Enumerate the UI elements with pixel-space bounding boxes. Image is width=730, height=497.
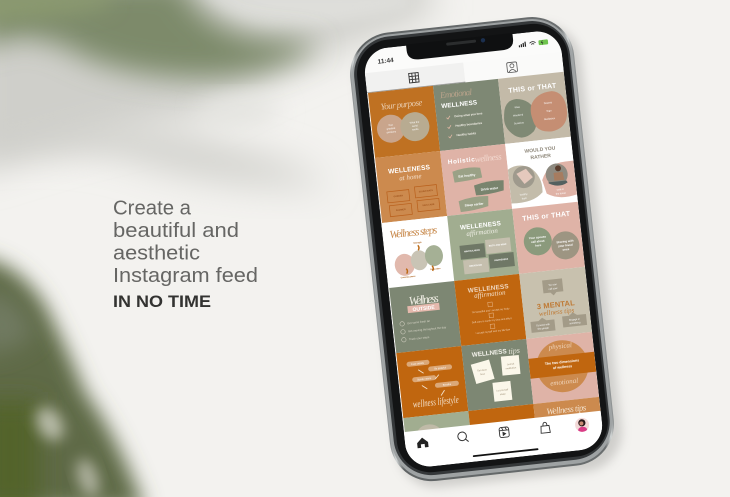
tile: wellness affirmation (orange): I accept myself and my life flow bbox=[476, 328, 510, 335]
profile tab bar bbox=[365, 52, 564, 93]
tile: wellness affirmation (orange): WELLENESS bbox=[467, 283, 510, 295]
tile: this or that (beige): Wine bbox=[514, 106, 521, 109]
icon: grid tab bbox=[409, 72, 419, 83]
tile: this or that (pink): ones bbox=[562, 247, 570, 252]
tile: wellness tips: Journal bbox=[507, 362, 515, 366]
tile: wellness lifestyle bbox=[396, 346, 468, 418]
tile: this or that (beige): Weekend bbox=[513, 113, 524, 117]
status bar: time: 11:44 bbox=[377, 57, 394, 66]
status bar: signal, wifi and battery icons bbox=[518, 39, 548, 47]
tile: 3 mental wellness tips: You can bbox=[548, 283, 558, 287]
tile: emotional wellness bbox=[433, 79, 505, 151]
tile: holistic wellness: Drink water bbox=[481, 186, 499, 192]
checklist: Healthy habits bbox=[456, 131, 477, 137]
tile: wellness tips: tips bbox=[508, 346, 520, 356]
camera bbox=[481, 38, 485, 43]
right circle: What the bbox=[410, 121, 420, 125]
left circle: Your bbox=[388, 123, 393, 127]
tile: would you rather: WOULD YOU bbox=[524, 145, 556, 155]
terracotta blob bbox=[530, 91, 567, 132]
right circle: world bbox=[412, 124, 419, 128]
tile: two dimensions of wellness: physical bbox=[547, 341, 572, 352]
tile: this or that (pink) bbox=[512, 202, 585, 274]
tile: wellness affirmation (orange): Self-care is worth my time and effort bbox=[472, 317, 512, 324]
tile: wellness lifestyle: Be grateful bbox=[434, 366, 447, 371]
phone drop shadow bbox=[353, 20, 626, 492]
checklist: Doing what you love bbox=[454, 111, 483, 118]
tile: 3 mental wellness tips: Engage in bbox=[569, 318, 581, 322]
headline text block: beautiful and bbox=[113, 220, 239, 242]
tile: wellness at home bbox=[375, 151, 447, 223]
tile: wellness affirmation (orange): I'm beautiful and I accept my body bbox=[472, 307, 510, 314]
tile: holistic wellness: Holistic bbox=[448, 156, 476, 166]
tile: would you rather: RATHER bbox=[530, 153, 552, 161]
tile: this or that (beige): Deserts bbox=[544, 101, 553, 105]
speaker bbox=[446, 40, 476, 46]
tile: 3 mental wellness tips bbox=[519, 267, 592, 339]
tile: wellness tips: Let yourself bbox=[496, 388, 509, 392]
pill labels bbox=[406, 360, 459, 388]
tile: wellness steps: Consciousness bbox=[401, 276, 416, 279]
tile row six: Wellness tips bbox=[546, 402, 587, 417]
headline text block: aesthetic bbox=[113, 242, 200, 264]
tile: wellness affirmation (sage): AWARENESS bbox=[494, 258, 509, 262]
tile: two dimensions of wellness: of wellness bbox=[553, 364, 572, 370]
green blob bbox=[504, 99, 536, 138]
headline text block: Create a bbox=[113, 198, 192, 220]
checklist bbox=[446, 111, 485, 138]
checklist: Healthy boundaries bbox=[455, 121, 483, 128]
tile: would you rather bbox=[505, 137, 578, 209]
tile: holistic wellness: Eat healthy bbox=[458, 173, 476, 179]
overlapping circles bbox=[394, 254, 414, 276]
tile: 3 mental wellness tips: call your bbox=[548, 287, 558, 291]
sticky notes bbox=[470, 355, 520, 402]
tile: holistic wellness: wellness bbox=[474, 151, 503, 164]
headline text block bbox=[113, 198, 258, 311]
tile: wellness affirmation (sage): BODY AND MIND bbox=[489, 243, 507, 248]
tile: wellness at home: at home bbox=[399, 172, 422, 183]
tile: two dimensions of wellness bbox=[526, 332, 599, 404]
tile: 3 mental wellness tips: wellness tips bbox=[538, 306, 575, 318]
home indicator bbox=[473, 448, 539, 457]
tile: two dimensions of wellness: The two dimensions bbox=[545, 358, 579, 366]
checklist: Track your steps bbox=[409, 335, 430, 341]
tile: 3 mental wellness tips: 3 MENTAL bbox=[536, 298, 576, 311]
checklist: Get moving throughout the day bbox=[408, 325, 447, 333]
tile: would you rather: walk in bbox=[557, 188, 565, 192]
tile: 3 mental wellness tips: Connect with bbox=[536, 323, 551, 327]
tile: would you rather: the forest bbox=[556, 192, 566, 196]
icon: tagged tab bbox=[507, 62, 518, 73]
tile: would you rather: food bbox=[522, 197, 527, 200]
orange marks bbox=[404, 244, 434, 274]
four boxes bbox=[459, 243, 486, 260]
tile: wellness tips bbox=[461, 339, 533, 411]
tile: wellness outside: OUTSIDE bbox=[412, 305, 436, 313]
tile: emotional wellness: WELLNESS bbox=[441, 99, 478, 110]
tile: your purpose bbox=[368, 86, 440, 158]
tile: wellness tips: Get clean bbox=[477, 368, 488, 372]
tile: two dimensions of wellness: emotional bbox=[550, 377, 579, 388]
tile: wellness tips: WELLNESS bbox=[471, 348, 508, 359]
tile: wellness steps: Relaxation bbox=[430, 267, 441, 271]
tile: wellness tips: sleep bbox=[500, 393, 506, 396]
icon: profile avatar bbox=[574, 417, 590, 434]
tile: wellness affirmation (orange) bbox=[454, 274, 526, 346]
tile: wellness affirmation (sage): BREATHING bbox=[469, 263, 483, 268]
left circle bbox=[377, 114, 404, 143]
headline text block: IN NO TIME bbox=[113, 292, 211, 311]
tile: wellness steps: Wellness steps bbox=[389, 224, 438, 241]
tile: wellness at home: WELLENESS bbox=[388, 164, 431, 176]
tile: this or that (pink): call about bbox=[531, 239, 545, 244]
tile: wellness at home: GARDEN bbox=[393, 194, 404, 198]
tile: this or that (beige): Yoga bbox=[546, 109, 552, 113]
tile: wellness lifestyle: wellness lifestyle bbox=[412, 395, 460, 411]
background: blurred shadow of top leaves bbox=[0, 0, 430, 186]
tile: wellness lifestyle: Face details bbox=[411, 362, 425, 366]
tile: wellness lifestyle: Speak nature bbox=[417, 377, 432, 381]
tile: wellness steps: Strength bbox=[413, 241, 422, 245]
tile: this or that (pink): here bbox=[535, 243, 542, 248]
tile: 3 mental wellness tips: the people bbox=[538, 326, 550, 331]
phone body bbox=[346, 13, 618, 485]
tile: wellness tips: food bbox=[480, 374, 486, 376]
tile: wellness affirmation (orange): affirmation bbox=[474, 288, 506, 300]
tile: wellness affirmation (sage): affirmation bbox=[466, 227, 499, 238]
tile: this or that (pink): THIS or THAT bbox=[522, 211, 571, 223]
phone mockup bbox=[346, 13, 618, 485]
tile: this or that (pink): Sharing with bbox=[556, 238, 574, 244]
bottom navigation bar bbox=[404, 411, 605, 469]
tile row six bbox=[403, 396, 601, 432]
icon: home bbox=[417, 437, 429, 448]
checklist: Get some fresh air bbox=[407, 319, 430, 325]
outlined boxes bbox=[387, 184, 440, 217]
tile: holistic wellness bbox=[440, 144, 512, 216]
tile: this or that (beige) bbox=[498, 72, 571, 144]
tile: wellness affirmation (sage) bbox=[447, 209, 519, 281]
checklist bbox=[407, 320, 446, 340]
tile: this or that (pink): your loved bbox=[558, 243, 573, 248]
tile: wellness affirmation (sage): MINDFULNESS bbox=[464, 250, 481, 253]
tile: wellness affirmation (sage): WELLENESS bbox=[460, 220, 502, 232]
tile: wellness tips: meditation bbox=[506, 366, 517, 370]
tile: holistic wellness: Sleep earlier bbox=[464, 202, 484, 208]
tile: this or that (beige): Meditation bbox=[544, 117, 556, 121]
headline text block: Instagram feed bbox=[113, 265, 258, 287]
tile: 3 mental wellness tips: something bbox=[569, 321, 581, 325]
icon: reels bbox=[499, 427, 509, 438]
icon: search bbox=[457, 431, 469, 443]
tile: this or that (beige): Sunshine bbox=[514, 121, 525, 125]
left circle: greatest bbox=[387, 127, 396, 131]
small arrows bbox=[418, 369, 445, 396]
blobs with photos bbox=[508, 166, 542, 204]
phone screen bbox=[362, 29, 605, 469]
tile: wellness outside: Wellness bbox=[408, 291, 440, 308]
tile: wellness at home: SOUND BATH bbox=[419, 189, 434, 193]
tile: wellness lifestyle: Breathe bbox=[443, 383, 452, 387]
tile: emotional wellness: Emotional bbox=[439, 87, 473, 100]
tile: wellness outside bbox=[389, 281, 461, 353]
circles bbox=[524, 227, 552, 256]
tile: this or that (pink): Your spouse bbox=[529, 234, 547, 240]
tile: wellness at home: SUMMER bbox=[396, 209, 406, 212]
tile: this or that (beige): THIS or THAT bbox=[508, 83, 557, 95]
icon: shop bag bbox=[540, 422, 550, 433]
tile: wellness at home: SKIN CARE bbox=[422, 203, 435, 207]
background: blurred leaf at bottom left bbox=[0, 256, 145, 497]
right circle bbox=[400, 112, 430, 142]
left circle: passions bbox=[387, 130, 397, 134]
tile: would you rather: healthy bbox=[520, 193, 528, 197]
labels bbox=[452, 166, 482, 183]
notch bbox=[406, 33, 514, 61]
right circle: needs bbox=[412, 128, 419, 131]
tile: wellness steps bbox=[382, 216, 447, 278]
script title: Your purpose bbox=[380, 97, 423, 112]
